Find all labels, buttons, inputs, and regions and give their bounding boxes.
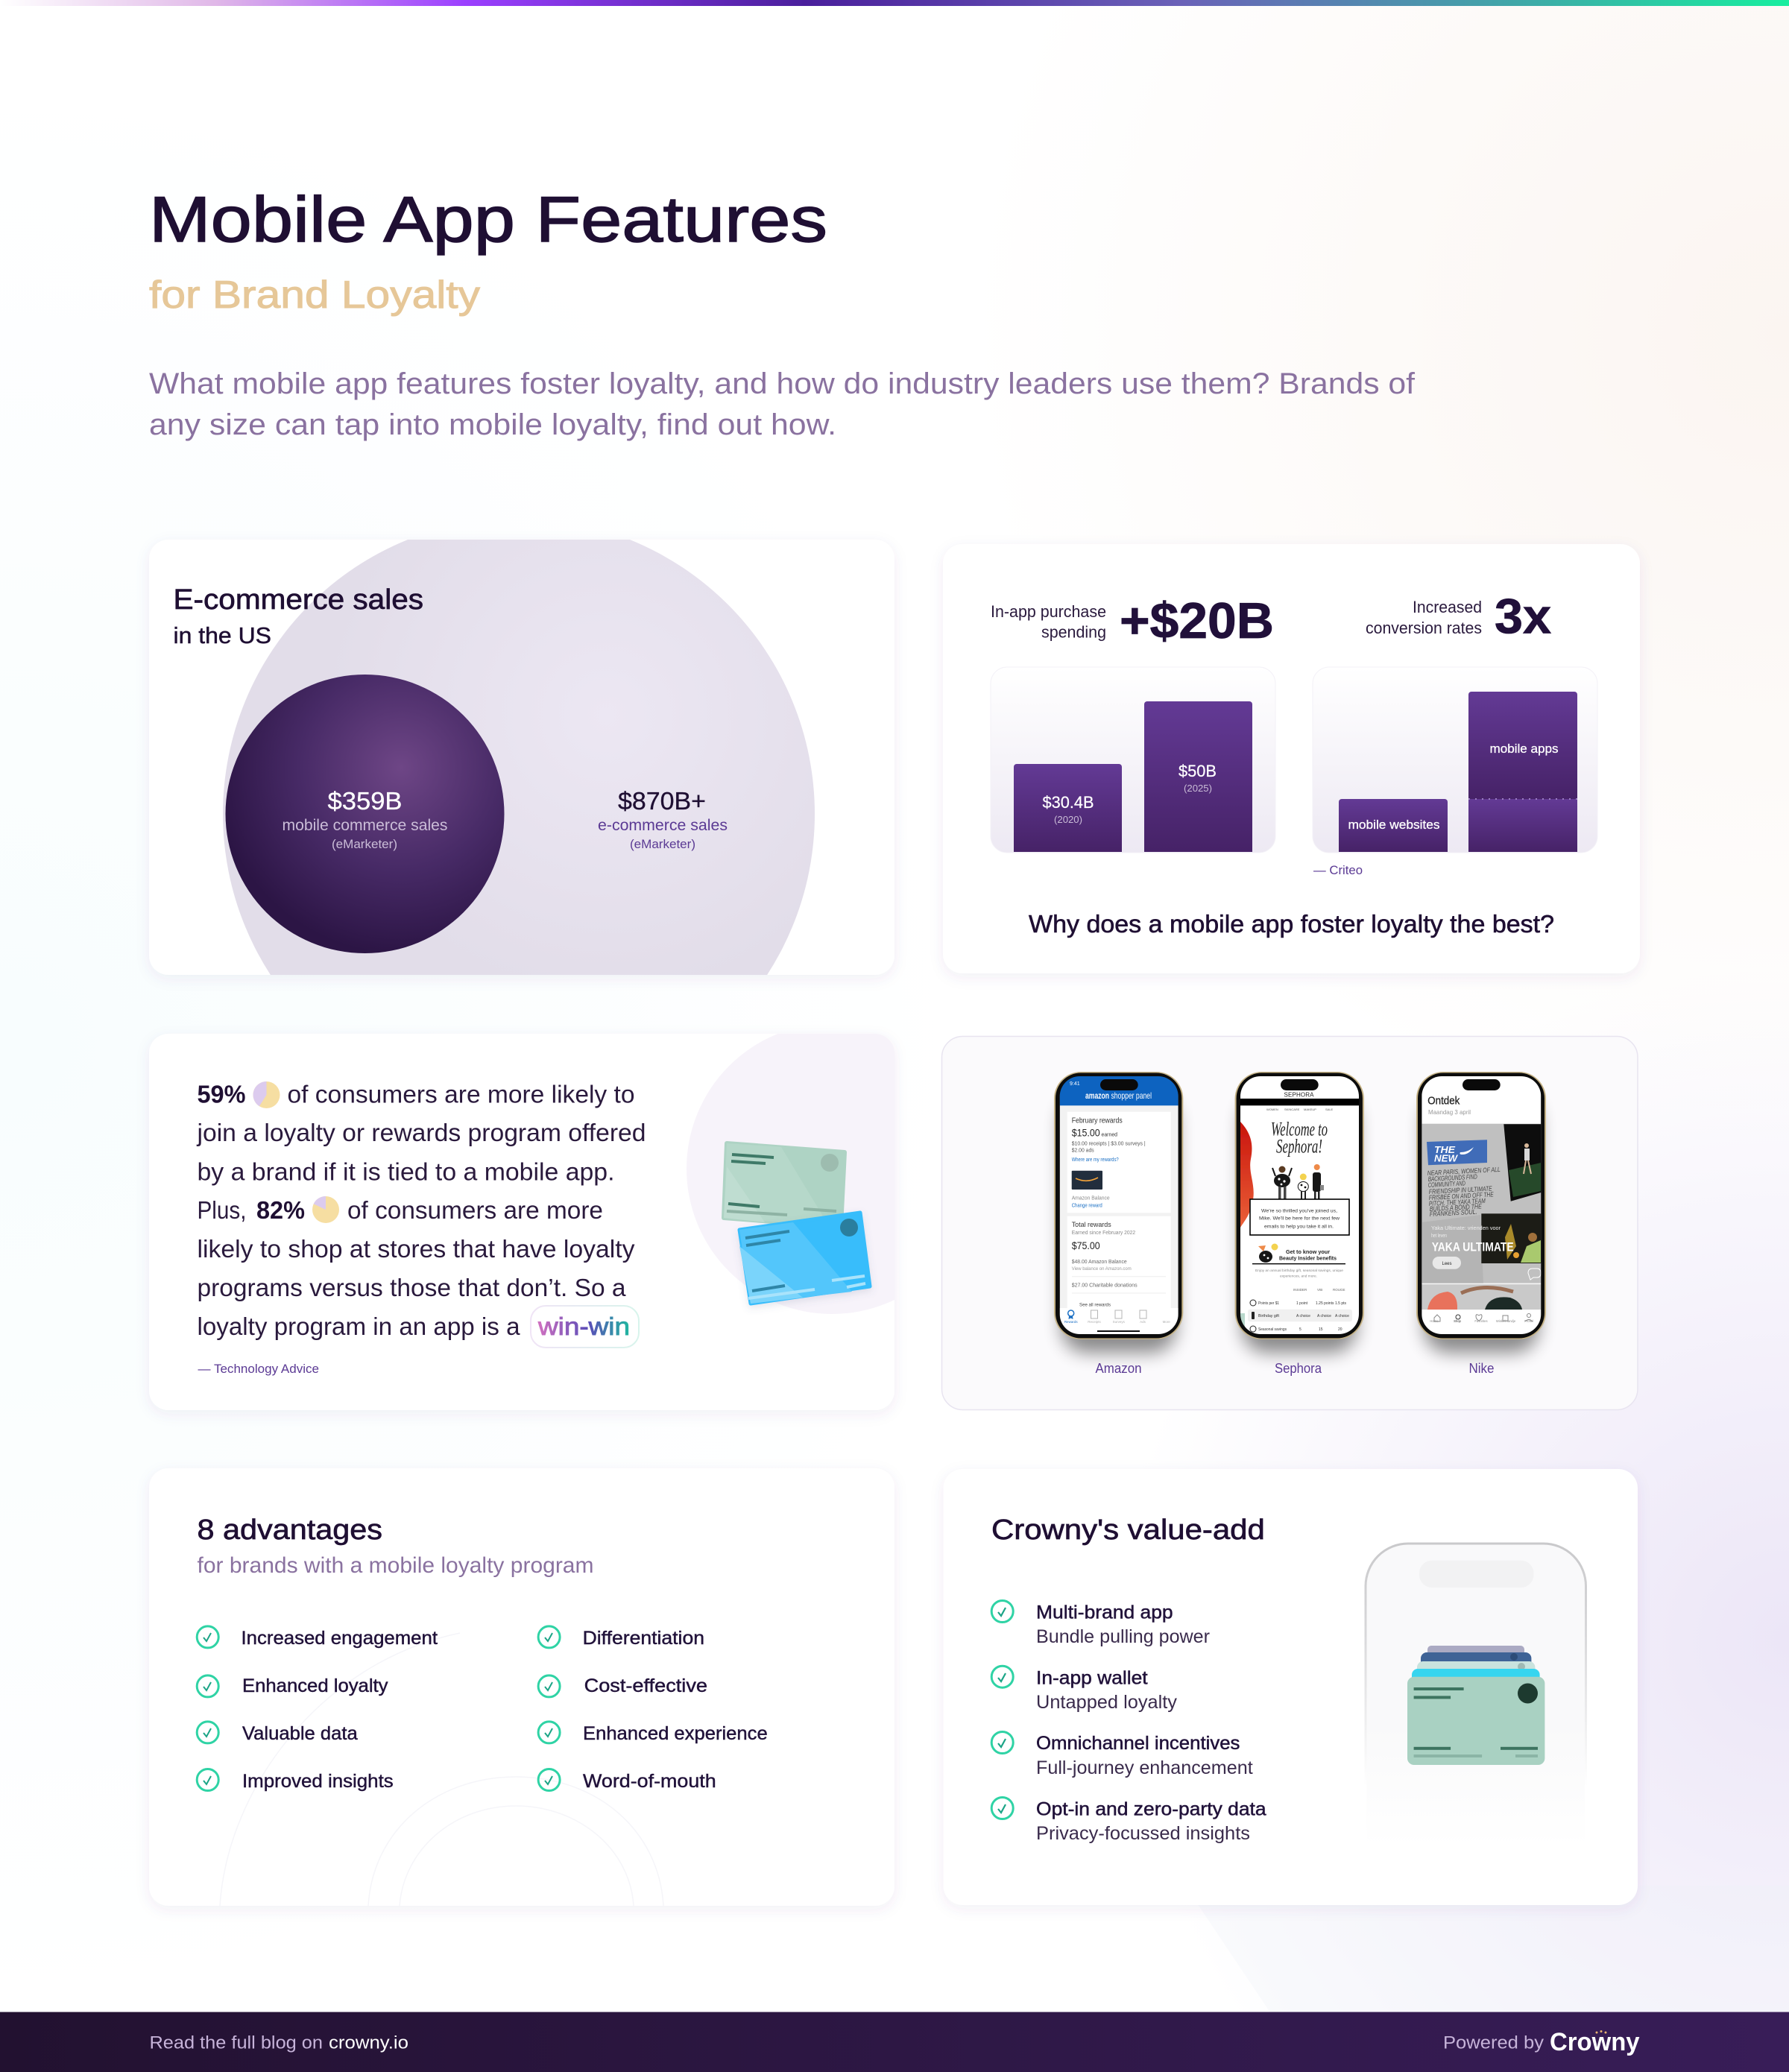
top gradient bar [0,0,1789,6]
title: Mobile App Features [149,184,827,256]
value-add descriptions [1036,1626,1253,1844]
phone: Nike: BUILDS A BOND THE [1430,1202,1483,1213]
phone: Sephora: INSIDER [1293,1288,1307,1292]
large circle: e-commerce [223,540,815,975]
phone: Amazon: $48.00 Amazon Balance [1072,1260,1127,1265]
logo: Crowny: Crowny [1550,2028,1640,2056]
phone: Sephora: We're so thrilled you've joined us, [1261,1209,1337,1214]
phone: Sephora: Mike. We'll be here for the next few [1259,1216,1340,1222]
statistic paragraph: join a loyalty or rewards program offered [196,1119,646,1146]
bar: mobile websites: mobile websites [1348,818,1440,832]
advantages list: Valuable data [242,1723,358,1744]
phone: Nike [1416,1072,1546,1353]
phone: Nike: Winkelmandje [1496,1319,1516,1323]
wallet card stack [1407,1646,1545,1765]
phone: Nike: Home [1430,1319,1439,1323]
phone: Amazon: Amazon Balance [1072,1195,1110,1201]
phone labels: Amazon [1096,1361,1142,1376]
bar chart: in-app spending [991,667,1275,853]
phone: Nike: Shop [1454,1319,1462,1323]
checklist icons [991,1601,1013,1819]
advantages list: Word-of-mouth [583,1771,716,1792]
value-add descriptions: Untapped loyalty [1036,1692,1178,1713]
bar: 2020: (2020) [1054,814,1082,825]
phone: Sephora: Beauty Insider benefits [1279,1255,1337,1262]
value-add titles [1036,1602,1266,1820]
phone: Amazon: See all rewards [1079,1303,1111,1308]
phone: Amazon: Surveys [1113,1320,1126,1324]
phone: Sephora: VIB [1317,1288,1322,1292]
phone: Nike: Favorites [1474,1319,1488,1323]
phone: Amazon: More [1163,1320,1170,1324]
footer link text [149,2033,408,2053]
statistic paragraph: Plus, [197,1196,246,1224]
stat: e-commerce: (eMarketer) [630,837,695,851]
phone: Amazon: Rewards [1064,1320,1078,1324]
phone: Nike: Ontdek [1427,1095,1460,1108]
phone: Nike: BACKGROUNDS FIND [1428,1173,1477,1183]
phone: Sephora: Sephora! [1276,1136,1322,1157]
stat: mobile commerce: $359B [328,787,403,815]
stat label: in-app purchase spending: spending [1041,623,1106,641]
decorative blob [687,1034,894,1314]
stat value: 3x: 3x [1495,589,1551,644]
statistic paragraph: of consumers are more likely to [288,1081,635,1108]
panel: in-app spending and conversion [943,544,1640,973]
phone labels [1096,1361,1494,1376]
phone: Nike: Yaka Ultimate: vrienden voor [1431,1225,1501,1231]
phone: Amazon: Ads [1140,1320,1146,1324]
phone: Nike: NEAR PARIS, WOMEN OF ALL [1427,1166,1501,1177]
statistic paragraph: 59% [197,1081,246,1108]
value-add descriptions: Full-journey enhancement [1036,1757,1253,1778]
statistic paragraph: by a brand if it is tied to a mobile app. [197,1158,614,1185]
bar chart: conversion rates [1313,667,1597,853]
phone: Nike: NEW [1434,1152,1459,1164]
phone: Nike: THE [1434,1144,1455,1155]
bar: 2025: (2025) [1184,783,1212,794]
phone: Sephora: 1 point [1296,1301,1308,1306]
advantages list [242,1628,768,1792]
phone: Amazon: Earned since February 2022 [1072,1231,1135,1236]
stat label: increased conversion rates [1366,598,1482,637]
phone: Nike: PITCH. THE YAKA TEAM [1429,1197,1486,1207]
intro text: any size can tap into mobile loyalty, find out how. [149,408,836,441]
phone: Sephora: A choice [1317,1314,1331,1318]
phone: Amazon: $10.00 receipts | $3.00 surveys | [1072,1140,1146,1147]
phone: Nike: COMMUNITY AND [1428,1179,1465,1189]
phone: Sephora: Points per $1 [1258,1301,1279,1306]
statistic paragraph: 82% [256,1196,305,1224]
icon: 82% pie [312,1196,339,1223]
phone: Nike: Profiel [1524,1319,1533,1323]
panel: Crowny's value-add [944,1469,1638,1905]
small circle: mobile commerce [225,675,504,953]
stat value: +$20B: +$20B [1120,593,1274,649]
value-add descriptions: Bundle pulling power [1036,1626,1210,1647]
phone: Sephora: 15 [1319,1327,1323,1332]
panel: loyalty statistics [148,1034,896,1415]
icon: green loyalty card [724,1143,845,1227]
bar: mobile websites [1339,799,1448,852]
panel: brand app examples [942,1036,1638,1410]
statistic paragraph: loyalty program in an app is a [197,1313,520,1340]
panel heading: E-commerce sales [173,584,423,616]
phone: Sephora: 1.5 pts [1335,1301,1347,1306]
phone: Amazon [1054,1072,1183,1353]
bar: 2025 [1144,701,1252,852]
stat label: increased conversion rates: Increased [1413,598,1482,616]
phone: Amazon: View balance on Amazon.com [1072,1266,1132,1272]
advantages list: Cost-effective [584,1675,707,1696]
panel subheading: in the US [173,622,271,648]
phone: Sephora: SKINCARE [1284,1108,1300,1111]
subtitle: for Brand Loyalty [149,274,480,317]
advantages list: Enhanced loyalty [242,1675,388,1696]
illustration: phone with wallet cards [1366,1544,1586,1847]
question heading: Why does a mobile app foster loyalty the best? [1029,910,1554,938]
value-add descriptions: Privacy-focussed insights [1036,1823,1250,1844]
phone: Amazon: $75.00 [1072,1239,1100,1251]
phone labels: Nike [1468,1361,1494,1376]
value-add titles: Multi-brand app [1036,1602,1173,1623]
footer link text: Read the full blog on [149,2033,323,2053]
intro text [149,367,1416,441]
phone: Nike: YAKA ULTIMATE [1432,1239,1514,1254]
phone: Sephora: WOMEN [1266,1108,1278,1111]
bar: mobile apps [1468,692,1577,852]
phone: Nike: Lees [1442,1261,1452,1266]
phone: Sephora: SALE [1325,1108,1334,1111]
phone: Sephora: 1.25 points [1316,1301,1334,1306]
stat: mobile commerce: (eMarketer) [332,837,397,851]
heading: Crowny's value-add [991,1514,1265,1546]
phone: Sephora: Birthday gift [1258,1314,1280,1318]
bar: mobile apps: mobile apps [1489,742,1558,756]
value-add titles: Opt-in and zero-party data [1036,1799,1266,1820]
phone: Amazon: 9:41 [1070,1081,1080,1087]
phone: Nike: het leven [1431,1232,1447,1239]
phone: Sephora: 5 [1299,1327,1301,1332]
subheading: for brands with a mobile loyalty program [197,1553,594,1578]
phone: Sephora: ROUGE [1333,1288,1345,1292]
phone: Amazon: Total rewards [1072,1221,1111,1229]
phone: Sephora: Get to know your [1286,1248,1330,1255]
source: Criteo: — Criteo [1313,863,1363,877]
phone: Amazon: $15.00 [1072,1127,1100,1139]
value-add titles: Omnichannel incentives [1036,1733,1240,1754]
stat: e-commerce [598,787,728,851]
stat: e-commerce: $870B+ [618,787,706,815]
phone: Sephora: emails to help you take it all in. [1264,1224,1334,1229]
heading: 8 advantages [197,1514,382,1546]
phone: Amazon: $2.00 ads [1072,1146,1094,1153]
statistic paragraph: programs versus those that don’t. So a [197,1274,626,1301]
highlight pill: win-win [531,1306,639,1348]
phone: Sephora: Seasonal savings [1258,1327,1287,1332]
phone: Nike: FRANKENS SOUL. [1430,1208,1477,1218]
phone labels: Sephora [1275,1361,1322,1376]
panel: 8 advantages [149,1468,894,1906]
icon: blue loyalty card [739,1213,870,1304]
phone: Amazon: $27.00 Charitable donations [1072,1283,1138,1288]
stat label: in-app purchase spending [991,602,1106,641]
phone: Nike: FRISBEE ON AND OFF THE [1429,1190,1495,1201]
footer powered by: Powered by [1443,2033,1544,2053]
phone: Sephora: A choice [1296,1314,1310,1318]
highlight pill: win-win: win-win [537,1313,630,1340]
phone: Amazon: earned [1102,1131,1117,1138]
phone: Sephora: Enjoy an annual birthday gift, seasonal savings, unique [1255,1269,1344,1272]
advantages list: Differentiation [583,1628,704,1649]
bar: 2025: $50B [1179,762,1217,780]
icon: 59% pie [253,1081,280,1108]
advantages list: Improved insights [242,1771,394,1792]
statistic paragraph [196,1081,646,1340]
stat: e-commerce: e-commerce sales [598,817,728,834]
phone: Sephora: Welcome to [1271,1118,1328,1140]
footer link text: crowny.io [329,2033,408,2053]
stat label: increased conversion rates: conversion rates [1366,619,1482,637]
checklist icons [197,1626,560,1790]
phone: Sephora: A choice [1335,1314,1349,1318]
source: Technology Advice: — Technology Advice [198,1362,319,1376]
phone: Nike: Maandag 3 april [1428,1109,1471,1116]
phone: Amazon: Receipts [1088,1320,1102,1324]
stat: mobile commerce: mobile commerce sales [282,817,447,834]
phone: Amazon: amazon shopper panel [1085,1090,1152,1101]
intro text: What mobile app features foster loyalty, and how do industry leaders use them? Brands of [149,367,1416,400]
phone: Amazon: February rewards [1072,1117,1123,1125]
phone: Sephora [1235,1072,1364,1353]
statistic paragraph: likely to shop at stores that have loyalty [197,1235,635,1263]
panel: e-commerce sales [148,540,896,979]
phone: Nike: FRIENDSHIP IN ULTIMATE [1429,1185,1493,1195]
statistic paragraph: of consumers are more [347,1196,603,1224]
phone: Sephora: SEPHORA [1284,1091,1314,1098]
decorative arcs [220,1633,663,1906]
phone: Sephora: 20 [1338,1327,1342,1332]
phone: Amazon: Change reward [1072,1204,1102,1209]
footer bar [0,2012,1789,2072]
phone: Sephora: MAKEUP [1304,1108,1316,1111]
advantages list: Increased engagement [242,1628,438,1649]
phone: Sephora: experiences, and more. [1280,1275,1317,1277]
advantages list: Enhanced experience [583,1723,768,1744]
phone: Amazon: Where are my rewards? [1072,1157,1119,1163]
value-add titles: In-app wallet [1036,1668,1148,1689]
bar: 2020 [1014,764,1122,852]
bar: 2020: $30.4B [1042,793,1094,812]
stat label: in-app purchase spending: In-app purchase [991,602,1106,621]
stat: mobile commerce [282,787,447,851]
